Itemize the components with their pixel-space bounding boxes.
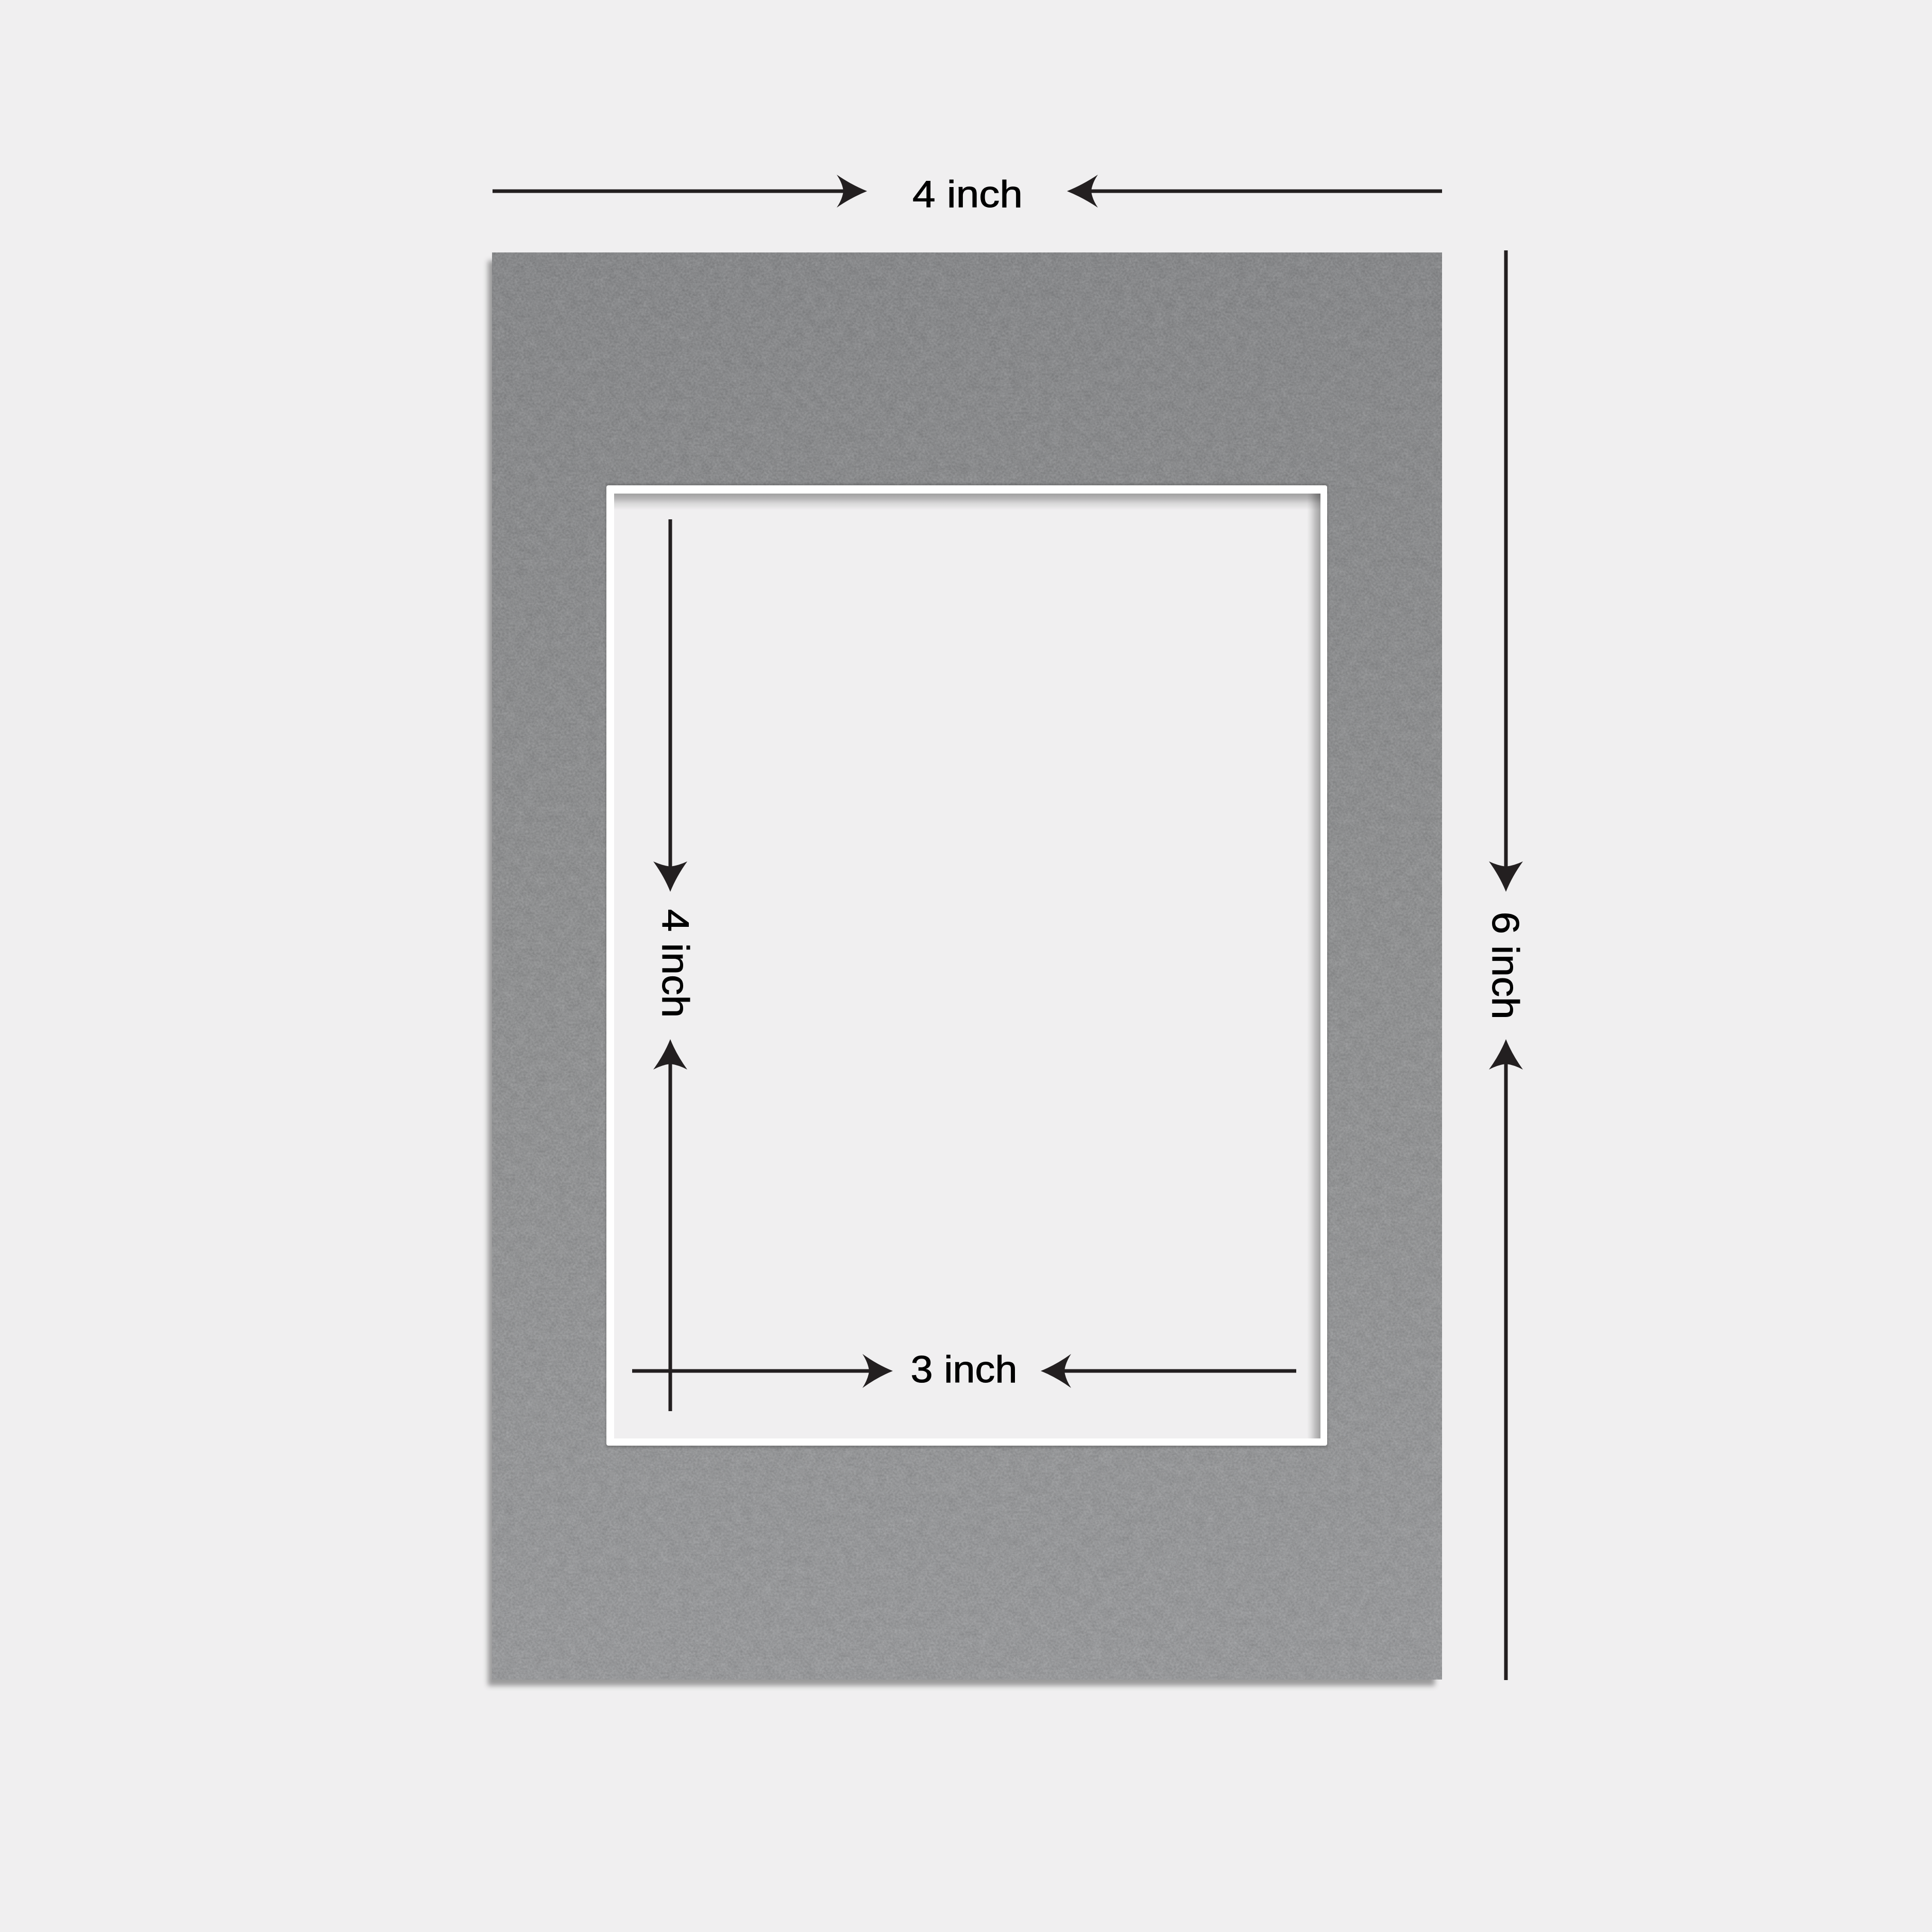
label: 4 inch window height: 4 inch [654, 909, 696, 1018]
mat board [492, 252, 1442, 1680]
arrow: right upper pointing down [1489, 250, 1523, 892]
arrow: bottom right pointing left [1041, 1354, 1296, 1388]
inner bevel shadow: top [614, 494, 1320, 510]
label: 6 inch: 6 inch [1484, 912, 1526, 1019]
arrow: right lower pointing up [1489, 1039, 1523, 1680]
arrow: left upper pointing down [653, 519, 687, 892]
mat drop shadow [488, 261, 1435, 1686]
window edge shadow [606, 484, 1328, 1448]
dimension: right height 6 inch [1484, 250, 1526, 1680]
white bevel [606, 485, 1327, 1446]
inner bevel shadow: right [1307, 494, 1320, 1438]
panel: grey photo mat with window opening [488, 252, 1442, 1686]
arrow: bottom left pointing right [632, 1354, 893, 1388]
arrow: top right pointing left [1067, 175, 1442, 208]
dimension: top width 4 inch [493, 174, 1442, 215]
arrow: top left pointing right [493, 175, 867, 208]
arrow: left lower pointing up [653, 1039, 687, 1411]
dimension: window height 4 inch [653, 519, 696, 1411]
window opening [614, 494, 1320, 1438]
label: 4 inch top: 4 inch [912, 174, 1023, 215]
dimension: window width 3 inch [632, 1349, 1296, 1391]
label: 3 inch: 3 inch [911, 1349, 1017, 1391]
